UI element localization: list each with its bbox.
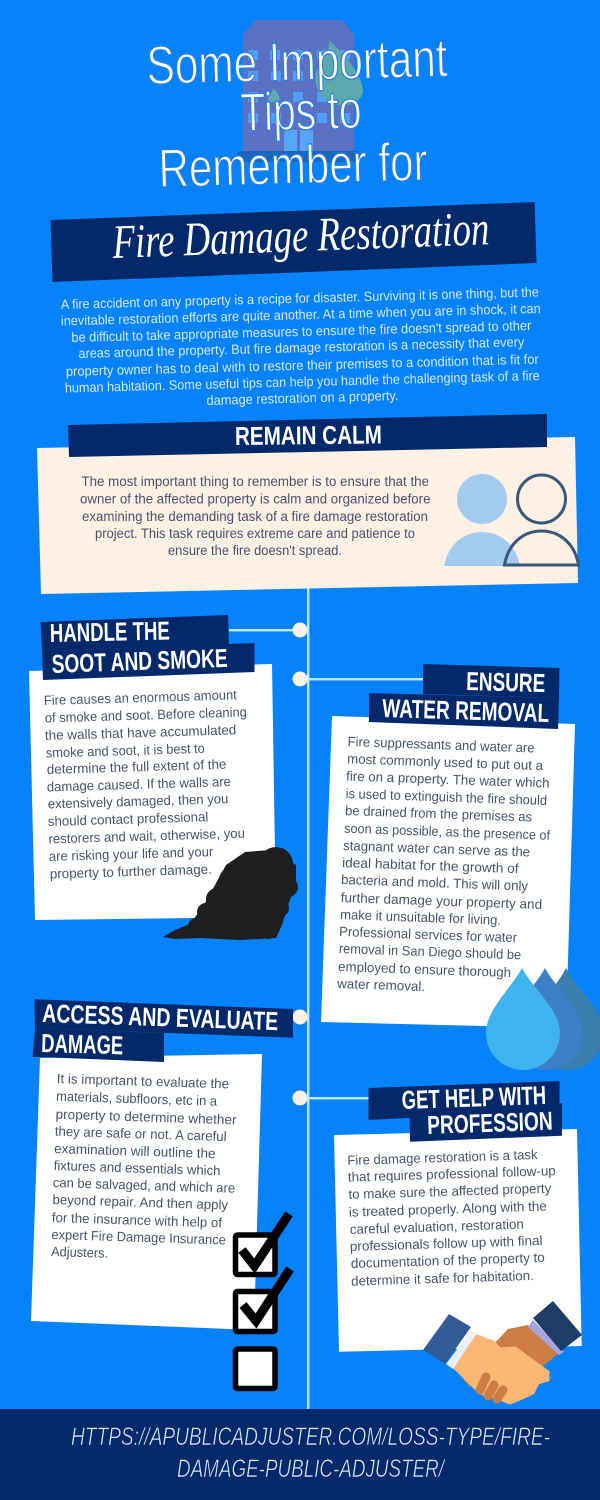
icon: two people	[444, 474, 578, 566]
panel: get help with profession: professionals follow up with final	[350, 1233, 543, 1254]
panel: ensure water removal: bacteria and mold. This will only	[341, 872, 529, 894]
panel: remain calm: project. This task requires extreme care and patience to	[95, 526, 415, 541]
connector dot 1	[229, 622, 308, 638]
icon: handshake	[423, 1301, 582, 1403]
panel: get help with profession: is treated properly. Along with the	[349, 1198, 547, 1220]
panel: get help with profession: documentation of the property to	[351, 1250, 545, 1271]
panel: ensure water removal: stagnant water can serve as the	[343, 838, 530, 860]
panel: ensure water removal	[321, 664, 600, 1070]
panel: access and evaluate damage: they are safe or not. A careful	[55, 1124, 227, 1144]
panel: ensure water removal: be drained from the premises as	[345, 803, 533, 825]
panel: ensure water removal: Fire suppressants and water are	[347, 734, 535, 756]
panel: ensure water removal: make it unsuitable for living.	[340, 907, 501, 928]
panel: access and evaluate damage: for the insurance with help of	[52, 1210, 223, 1230]
connector dot 4	[292, 1090, 369, 1106]
icon: water drops	[486, 968, 600, 1070]
panel: ensure water removal: ideal habitat for the growth of	[342, 855, 519, 876]
panel: ensure water removal: removal in San Diego should be	[339, 941, 522, 962]
title	[146, 28, 448, 199]
panel: handle the soot and smoke: of smoke and soot. Before cleaning	[45, 705, 247, 725]
panel: handle the soot and smoke: should contact professional	[48, 809, 209, 829]
panel: get help with profession: that requires professional follow-up	[348, 1163, 556, 1185]
icon: burning building	[237, 20, 363, 162]
intro text: human habitation. Some useful tips can help you handle the challenging task of a fire	[65, 368, 540, 395]
panel: ensure water removal: ENSURE	[466, 666, 546, 698]
intro text: A fire accident on any property is a recipe for disaster. Surviving it is one thing, but the	[61, 284, 539, 312]
panel: remain calm: The most important thing to remember is to ensure that the	[82, 474, 429, 489]
panel: access and evaluate damage: Adjusters.	[51, 1244, 108, 1261]
panel: get help with profession	[334, 1080, 582, 1403]
intro text: inevitable restoration efforts are quite another. At a time when you are in shock, it can	[61, 301, 541, 328]
panel: handle the soot and smoke: Fire causes an enormous amount	[44, 687, 237, 708]
heading band: Fire Damage Restoration: Fire Damage Restoration	[111, 202, 490, 269]
panel: handle the soot and smoke: extensively damaged, then you	[48, 791, 229, 811]
panel: handle the soot and smoke: property to further damage.	[50, 862, 212, 881]
panel: handle the soot and smoke: damage caused. If the walls are	[47, 774, 231, 794]
connector dot 2	[292, 672, 424, 686]
panel: access and evaluate damage: property to determine whether	[55, 1107, 237, 1127]
panel: handle the soot and smoke: restorers and wait, otherwise, you	[48, 826, 245, 846]
panel: ensure water removal: water removal.	[336, 976, 425, 994]
footer band with URL: DAMAGE-PUBLIC-ADJUSTER/	[177, 1455, 446, 1483]
panel: get help with profession: to make sure the affected property	[348, 1181, 552, 1202]
panel: get help with profession: determine it safe for habitation.	[351, 1268, 534, 1289]
panel: access and evaluate damage: beyond repair. And then apply	[52, 1192, 229, 1213]
panel: access and evaluate damage: It is important to evaluate the	[57, 1071, 229, 1091]
panel: remain calm	[37, 414, 578, 594]
panel: get help with profession: PROFESSION	[427, 1106, 553, 1140]
panel: handle the soot and smoke: HANDLE THE	[49, 615, 170, 648]
title: Some Important	[146, 28, 448, 96]
panel: access and evaluate damage: can be salvaged, and which are	[53, 1175, 235, 1196]
panel: ensure water removal: most commonly used to put out a	[347, 751, 544, 773]
title: Tips to	[240, 80, 362, 143]
panel: get help with profession: GET HELP WITH	[401, 1080, 547, 1115]
panel: access and evaluate damage: materials, subfloors, etc in a	[56, 1089, 218, 1109]
panel: handle the soot and smoke: the walls that have accumulated	[45, 722, 237, 743]
panel: remain calm: examining the demanding task of a fire damage restoration	[82, 509, 428, 524]
panel: access and evaluate damage: fixtures and essentials which	[54, 1158, 221, 1178]
panel: access and evaluate damage: DAMAGE	[41, 1028, 124, 1060]
panel: access and evaluate damage	[31, 998, 293, 1388]
connector dot 3	[292, 1010, 308, 1024]
panel: ensure water removal: is used to extinguish the fire should	[345, 786, 547, 808]
panel: handle the soot and smoke: smoke and soot, it is best to	[46, 741, 205, 760]
timeline line	[307, 585, 309, 1410]
panel: ensure water removal: Professional services for water	[339, 924, 518, 945]
panel: get help with profession: Fire damage restoration is a task	[347, 1147, 538, 1168]
panel: handle the soot and smoke: determine the full extent of the	[47, 757, 227, 777]
heading band: Fire Damage Restoration	[50, 202, 536, 282]
intro text: be difficult to take appropriate measures to ensure the fire doesn't spread to other	[71, 318, 532, 345]
panel: remain calm: REMAIN CALM	[235, 419, 382, 451]
panel: access and evaluate damage: expert Fire Damage Insurance	[51, 1227, 226, 1247]
intro text	[61, 284, 541, 408]
panel: remain calm: ensure the fire doesn't spread.	[168, 543, 342, 558]
panel: ensure water removal: fire on a property. The water which	[346, 769, 550, 791]
panel: access and evaluate damage: examination will outline the	[54, 1141, 216, 1161]
panel: handle the soot and smoke: are risking your life and your	[49, 844, 214, 864]
panel: handle the soot and smoke	[29, 615, 298, 940]
panel: get help with profession: careful evaluation, restoration	[350, 1217, 524, 1237]
panel: ensure water removal: soon as possible, as the presence of	[344, 821, 551, 843]
title: Remember for	[158, 132, 428, 199]
panel: ensure water removal: employed to ensure thorough	[338, 959, 511, 980]
icon: smoke cloud	[163, 847, 298, 940]
icon: checklist	[236, 1214, 290, 1388]
intro text: damage restoration on a property.	[206, 388, 399, 408]
panel: remain calm: owner of the affected property is calm and organized before	[80, 492, 430, 506]
intro text: property owner has to deal with to restore their premises to a condition that is fit for	[66, 352, 539, 379]
footer band with URL	[0, 1409, 600, 1500]
panel: ensure water removal: further damage your property and	[340, 890, 542, 912]
panel: access and evaluate damage: ACCESS AND EVALUATE	[42, 998, 279, 1036]
panel: handle the soot and smoke: SOOT AND SMOKE	[51, 643, 228, 679]
intro text: areas around the property. But fire damage restoration is a necessity that every	[78, 334, 525, 361]
